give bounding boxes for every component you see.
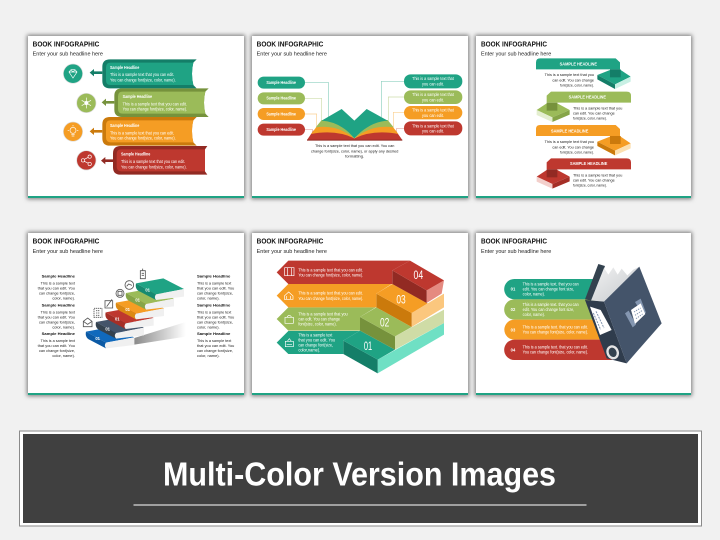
sub headline: Enter your sub headline here: [481, 52, 551, 58]
book 2: green: Sample Headline: [123, 94, 153, 99]
sub headline: Enter your sub headline here: [33, 249, 103, 255]
left text blocks: can change font(size,: [39, 348, 75, 353]
book 1: teal: This is a sample text that you can edit.: [110, 72, 174, 77]
right labels: This is a sample text that: [412, 108, 455, 113]
teal book: 01: [145, 288, 151, 293]
arrow and icon 4: [76, 150, 113, 170]
cover label: [625, 299, 646, 327]
block 01: 01: [364, 339, 372, 353]
block 04: 04: [413, 268, 423, 282]
right labels: This is a sample text that: [412, 76, 455, 81]
block 04: You can change font(size, color, name).: [298, 273, 363, 278]
binder: [585, 264, 662, 363]
left text blocks: This is a sample text: [41, 309, 76, 314]
ribbon book 2: [537, 92, 631, 122]
left text blocks: that you can edit. You: [38, 314, 75, 319]
left text blocks: Sample Headline: [42, 274, 76, 279]
sub headline: Enter your sub headline here: [257, 249, 327, 255]
pill 01: edit. You can change font size,: [523, 287, 574, 292]
sub headline: Enter your sub headline here: [33, 52, 103, 58]
pill 04: You can change font(size, color, name).: [523, 350, 588, 355]
book 4: red: Sample Headline: [121, 152, 151, 157]
left text blocks: [38, 274, 76, 358]
slide 1: stacked books with icons: [27, 35, 245, 199]
left labels: [258, 77, 305, 136]
orange book: 01: [125, 307, 131, 312]
caption: [311, 143, 398, 159]
ribbon book 1: can edit. You can change: [552, 77, 595, 82]
left text blocks: that you can edit. You: [38, 286, 75, 291]
block 04: This is a sample text that you can edit.: [298, 267, 363, 272]
heading: BOOK INFOGRAPHIC: [33, 237, 100, 246]
left text blocks: Sample Headline: [42, 331, 76, 336]
heading: BOOK INFOGRAPHIC: [481, 40, 548, 49]
ribbon book 4: SAMPLE HEADLINE: [570, 161, 608, 166]
spine hole: [606, 345, 620, 360]
book 2: green: You can change font(size, color, name).: [123, 107, 187, 112]
pill 03: This is a sample text. that you can edit.: [523, 325, 588, 330]
step icons: [83, 269, 145, 327]
block 01: that you can edit. You: [298, 337, 336, 342]
pill 02: This is a sample text. that you can: [523, 302, 579, 307]
left labels: Sample Headline: [266, 80, 297, 85]
book 1: teal: You can change font(size, color, name).: [110, 77, 176, 82]
book 3: orange: You can change font(size, color, name).: [110, 136, 176, 141]
red book: 01: [115, 317, 120, 322]
left labels: Sample Headline: [266, 96, 297, 101]
right labels: you can edit.: [422, 81, 444, 86]
pill 02: 02: [511, 307, 516, 312]
heading: BOOK INFOGRAPHIC: [257, 237, 324, 246]
block 02: This is a sample text that you: [298, 311, 348, 316]
pill 01: [504, 279, 598, 299]
pill 02: edit. You can change font size,: [523, 307, 574, 312]
green book: 01: [135, 297, 141, 302]
ribbon book 2: SAMPLE HEADLINE: [569, 95, 606, 100]
book 3: orange: This is a sample text that you can edit.: [110, 130, 174, 135]
caption: change font(size, color, name), or apply any desired: [311, 148, 398, 153]
block 01: [277, 323, 444, 373]
pill 03: [504, 320, 603, 340]
spine label: [590, 307, 612, 335]
left text blocks: that you can edit. You: [38, 343, 75, 348]
right labels: you can edit.: [422, 97, 444, 102]
block 02: 02: [380, 315, 390, 329]
left text blocks: This is a sample text: [41, 338, 76, 343]
sub headline: Enter your sub headline here: [481, 249, 551, 255]
ribbon book 3: [536, 125, 631, 155]
block 03: This is a sample text that you can edit.: [298, 291, 363, 296]
block 03: You can change font(size, color, name).: [298, 296, 363, 301]
heading: BOOK INFOGRAPHIC: [33, 40, 100, 49]
book 4: red: This is a sample text that you can edit.: [121, 159, 185, 164]
right labels: you can edit.: [422, 129, 444, 134]
right labels: [404, 74, 462, 135]
open book: [307, 109, 402, 141]
right text blocks: [197, 274, 234, 358]
block 01: This is a sample text: [298, 332, 333, 337]
ribbon book 3: This is a sample text that you: [545, 139, 594, 144]
ribbon book 4: font(size, color, name).: [573, 183, 607, 188]
left text blocks: color, name).: [52, 324, 75, 329]
caption: This is a sample text that you can edit. You can: [315, 143, 394, 148]
pill 03: 03: [511, 327, 516, 332]
blue book: 01: [95, 336, 101, 341]
right text blocks: can change font(size,: [197, 291, 233, 296]
block 01: can change font(size,: [298, 342, 333, 347]
right labels: This is a sample text that: [412, 92, 455, 97]
ribbon book 4: can edit. You can change: [573, 178, 615, 183]
left text blocks: color, name).: [52, 296, 75, 301]
heading: BOOK INFOGRAPHIC: [257, 40, 324, 49]
pill 01: color, name).: [523, 292, 545, 297]
left text blocks: This is a sample text: [41, 281, 76, 286]
ribbon book 4: [537, 158, 631, 189]
book 4: red: You can change font(size, color, name).: [121, 164, 187, 169]
slide 4: book staircase: [27, 232, 245, 396]
ribbon book 1: SAMPLE HEADLINE: [560, 61, 597, 66]
caption: formatting.: [345, 154, 364, 159]
book 1: teal: [102, 59, 197, 88]
book 2: green: [114, 88, 209, 117]
right text blocks: that you can edit. You: [197, 286, 234, 291]
block 02: can edit. You can change: [298, 316, 341, 321]
banner: multi-color version images: [20, 431, 702, 526]
pill 04: [504, 340, 612, 360]
block 03: 03: [396, 292, 406, 306]
right text blocks: can change font(size,: [197, 319, 233, 324]
book 3: orange: [102, 117, 197, 146]
banner title: Multi-Color Version Images: [163, 456, 556, 492]
right text blocks: that you can edit. You: [197, 343, 234, 348]
right text blocks: This is a sample text: [197, 309, 232, 314]
right text blocks: that you can edit. You: [197, 314, 234, 319]
pill 01: This is a sample text. that you can: [523, 282, 579, 287]
right text blocks: Sample Headline: [197, 331, 231, 336]
ribbon book 2: This is a sample text that you: [573, 105, 622, 110]
book shadow: [134, 322, 186, 345]
pill 02: color, name).: [523, 312, 545, 317]
heading: BOOK INFOGRAPHIC: [481, 237, 548, 246]
block 04: [277, 261, 444, 303]
arrow and icon 1: [63, 64, 102, 84]
ribbon book 1: font(size, color, name).: [560, 82, 594, 87]
ribbon book 1: This is a sample text that you: [545, 72, 594, 77]
book 3: orange: Sample Headline: [110, 123, 140, 128]
left text blocks: can change font(size,: [39, 291, 75, 296]
ribbon book 3: SAMPLE HEADLINE: [551, 128, 589, 133]
left labels: Sample Headline: [266, 111, 297, 116]
navy book: 01: [105, 326, 111, 331]
block 02: font(size, color, name).: [298, 321, 337, 326]
pill 02: [504, 299, 598, 320]
arrow and icon 3: [63, 122, 102, 142]
right text blocks: can change font(size,: [197, 348, 233, 353]
right text blocks: This is a sample text: [197, 281, 232, 286]
block 01: color,name).: [298, 347, 320, 352]
stack of books: [86, 278, 184, 348]
slide 3: ribbon books: [475, 35, 692, 199]
ribbon book 4: This is a sample text that you: [573, 173, 622, 178]
book 2: green: This is a sample text that you can edit.: [123, 101, 187, 106]
block 03: [277, 284, 444, 327]
slide 6: binder book: [475, 232, 692, 396]
block 02: [277, 307, 444, 350]
pill 03: You can change font(size, color, name).: [523, 330, 588, 335]
book 1: teal: Sample Headline: [110, 65, 140, 70]
left labels: Sample Headline: [266, 127, 297, 132]
arrow and icon 2: [76, 93, 114, 113]
ribbon book 2: can edit. You can change: [573, 111, 615, 116]
slide 2: open book with labels: [251, 35, 469, 199]
book 4: red: [113, 146, 207, 175]
right text blocks: color, name).: [197, 353, 220, 358]
right text blocks: color, name).: [197, 296, 220, 301]
right text blocks: This is a sample text: [197, 338, 232, 343]
ribbon book 1: [536, 58, 631, 89]
ribbon book 3: font(size, color, name).: [560, 149, 594, 154]
connector lines: [305, 81, 404, 133]
right text blocks: Sample Headline: [197, 274, 231, 279]
pill 04: This is a sample text. that you can edit.: [523, 345, 588, 350]
slide 5: isometric block books: [251, 232, 469, 396]
left text blocks: Sample Headline: [42, 302, 76, 307]
right text blocks: color, name).: [197, 324, 220, 329]
right text blocks: Sample Headline: [197, 302, 231, 307]
left text blocks: can change font(size,: [39, 319, 75, 324]
left text blocks: color, name).: [52, 353, 75, 358]
right labels: you can edit.: [422, 113, 444, 118]
ribbon book 3: can edit. You can change: [552, 144, 595, 149]
ribbon book 2: font(size, color, name).: [573, 116, 607, 121]
pill 04: 04: [511, 347, 516, 352]
pill 01: 01: [511, 287, 516, 292]
sub headline: Enter your sub headline here: [257, 52, 327, 58]
right labels: This is a sample text that: [412, 123, 455, 128]
